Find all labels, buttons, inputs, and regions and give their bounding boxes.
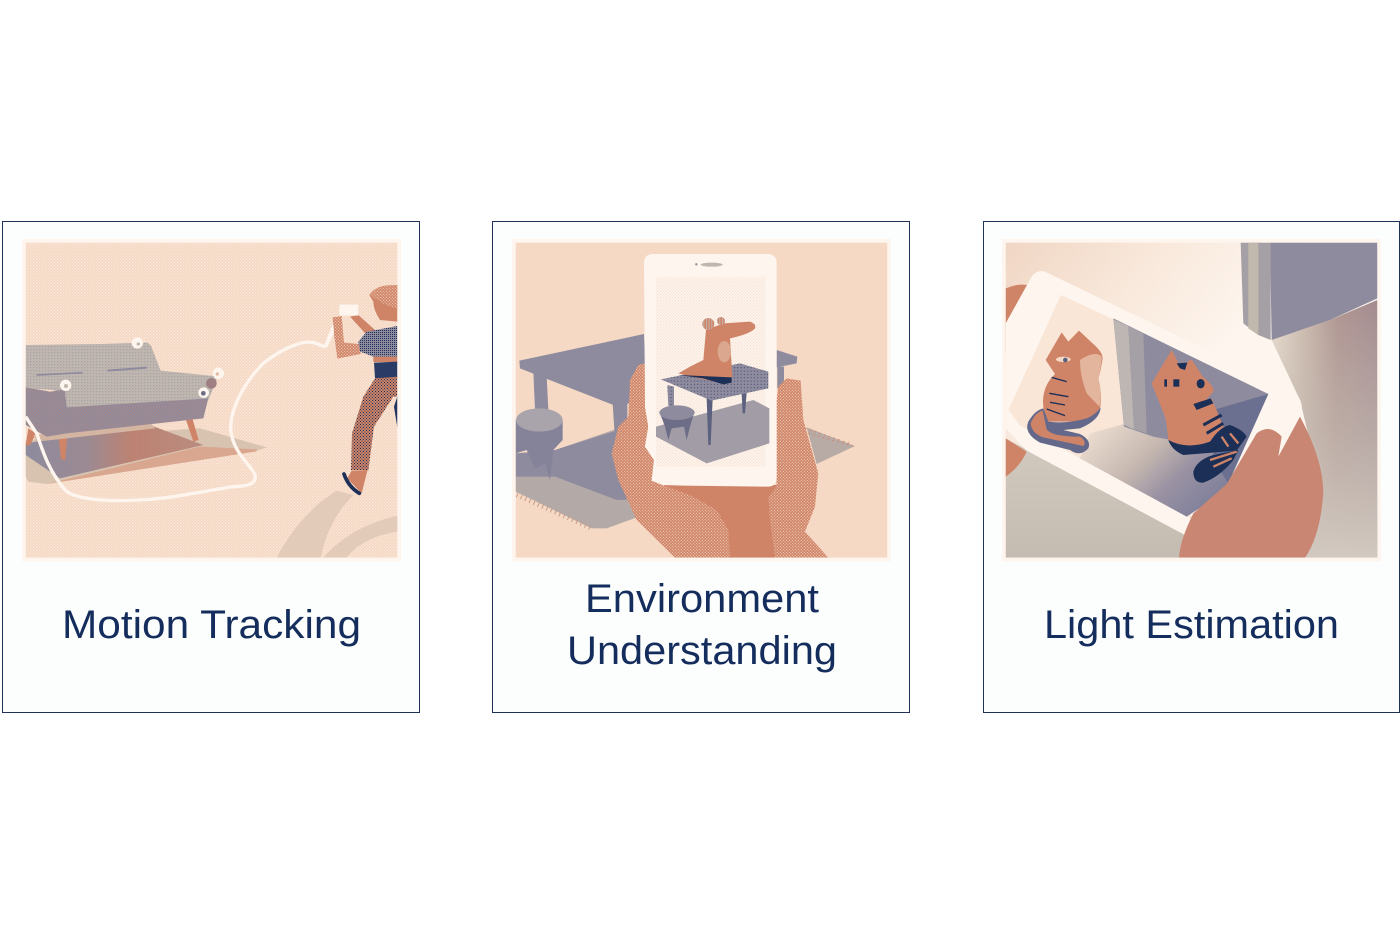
illustration: phone scanning a table	[512, 239, 891, 561]
label: light estimation: Light Estimation	[1044, 603, 1339, 647]
label: environment understanding: Understanding	[567, 629, 837, 673]
panel: environment understanding	[492, 222, 910, 712]
label: environment understanding: Environment	[585, 577, 819, 621]
panel: motion tracking	[2, 222, 420, 712]
label: motion tracking: Motion Tracking	[62, 603, 361, 647]
illustration: person scanning a sofa	[22, 239, 401, 561]
label: environment understanding	[567, 577, 837, 673]
illustration: phone with cats under changing light	[1002, 239, 1381, 561]
panel: light estimation	[984, 222, 1400, 712]
